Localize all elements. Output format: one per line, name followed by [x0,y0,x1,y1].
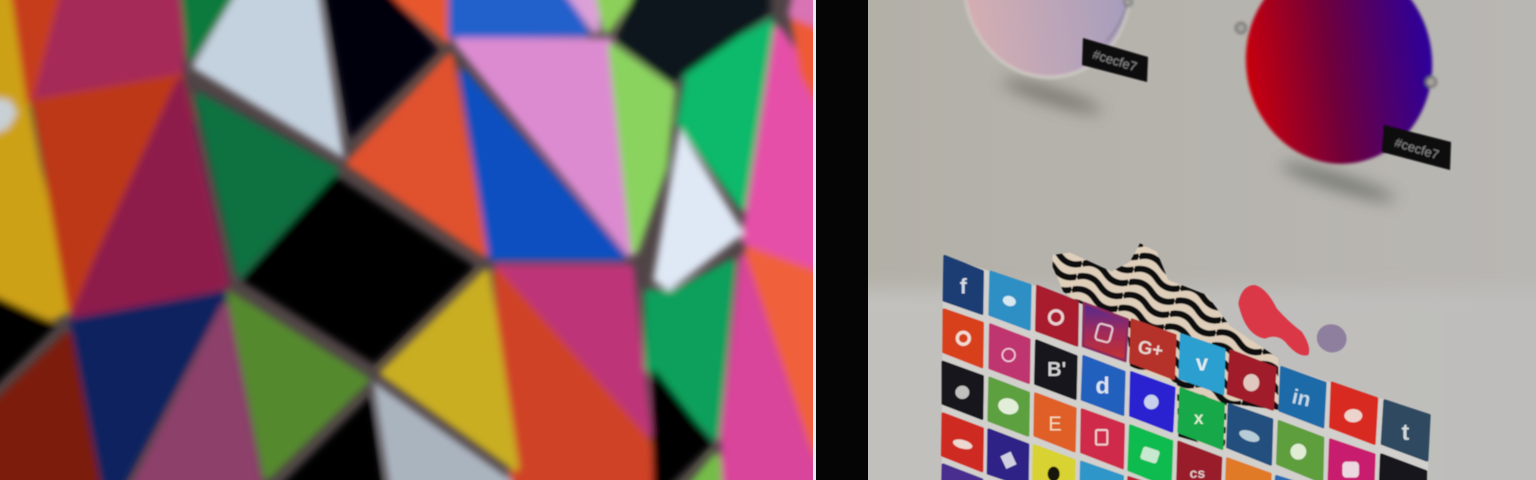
vivid gradient circle [1233,0,1445,176]
tile: tumblr: t [1401,419,1409,445]
blue bottom [730,460,790,480]
tile: stack [988,430,1028,480]
tile: reddit [1330,383,1377,444]
tile: linkedin [1280,367,1325,427]
orange facet [36,78,190,310]
yellow facet centre [384,273,515,467]
pale gradient circle [951,0,1143,90]
black top facet [322,0,437,137]
tile: delicious [1082,356,1124,415]
tile: soundcloud [942,414,983,471]
shadow: pale circle [1000,74,1104,118]
tile: blue [1275,476,1320,480]
grid backing [941,256,1430,480]
monitor edge [813,0,817,480]
circle fill [1233,0,1445,176]
orange strip [8,0,64,108]
black lower right facet [654,370,711,480]
blue large facet [463,73,622,257]
olive green facet [231,296,366,476]
label text: #cecfe7 [1393,135,1441,162]
tile: twitter [990,272,1030,329]
orange diamond facet [350,57,484,253]
handle right [1426,77,1436,87]
pink corner [792,0,830,28]
tile: tumblr [1382,401,1429,460]
tile: dribbble [990,325,1029,383]
green top facet [183,0,243,57]
bright green facet [680,23,771,207]
orange top facet [377,0,447,40]
tile: behance [1035,341,1076,399]
pink right lower [724,258,830,480]
pale spot [0,96,17,140]
tile: vimeo: v [1196,351,1209,376]
circle fill [953,0,1141,87]
wall upper background [868,0,1536,480]
tile: google plus [1130,320,1175,379]
tile: facebook: f [960,274,968,298]
label box [1382,125,1451,170]
orange right lower [739,241,813,464]
tile: flickr [1329,440,1374,480]
black diamond [243,177,473,363]
tile: facebook [944,256,983,314]
label box [1082,38,1148,82]
tile: blogger [944,310,983,367]
icon grid and blobs [941,243,1430,480]
tile: evernote [1277,421,1323,480]
wave pattern blob [1053,243,1278,450]
tile: digg [1227,405,1272,464]
white right facet [654,130,743,290]
panel: design board [840,0,1536,480]
mauve blob [1313,320,1351,357]
light green top [596,0,642,30]
tile: google plus: G+ [1136,336,1165,361]
mauve facet [128,308,262,480]
tile: snapchat [1033,445,1074,480]
tile: pinterest [1036,286,1078,345]
tile: red small [1128,477,1147,480]
colour label: pale [1082,38,1148,82]
tile: xing [1179,389,1224,449]
grey facet [374,383,512,480]
label text: #cecfe7 [1091,47,1139,74]
pink facet [458,42,630,253]
wall lower background [840,289,1536,480]
tile: vimeo [1180,335,1224,394]
tile: orange [1226,459,1270,480]
small pink top facet [560,0,596,30]
black facet left [0,290,55,400]
dashed connector [1106,2,1128,42]
green lower facet [648,263,732,437]
tile: wechat [989,378,1029,435]
tile: youtube [1228,351,1275,409]
tile: purple [942,465,982,480]
tile: dark [1380,455,1426,480]
light green bottom [680,457,726,480]
tile: blue second [1081,462,1123,480]
light green facet [612,47,672,250]
tile: foursquare [1081,410,1124,468]
dark green facet [199,97,335,273]
tile: delicious: d [1096,372,1110,398]
navy facet [74,295,222,480]
magenta facet [497,268,648,433]
tile: instagram [1083,303,1128,361]
blue top facet [452,0,586,35]
tile: etsy: E [1048,414,1062,436]
maroon top facet [36,0,182,103]
yellow facet [0,0,71,317]
handle left [1236,23,1246,33]
black lower facet [268,397,384,480]
tile: xing: x [1194,408,1204,428]
tile: behance: B' [1047,359,1066,381]
tile: etsy [1035,394,1075,451]
tile: linkedin: in [1290,385,1313,412]
tile: lastfm [1177,442,1221,480]
pink right facet [745,30,830,280]
handle [1124,0,1132,6]
maroon lower facet [74,82,226,318]
white facet [193,0,343,157]
monitor bezel [816,0,868,480]
panel: blurred geometric screen [0,0,830,480]
shadow: vivid circle [1279,158,1397,206]
colour label: vivid [1382,125,1451,170]
tile: dailymotion [1130,372,1174,431]
tile: houzz [1129,426,1172,480]
social tiles [942,256,1429,480]
red orange facet [497,273,650,480]
orange right strip [785,14,813,108]
tile: github [943,362,983,419]
black top right facet [617,0,769,82]
red blob [1238,285,1309,356]
dark red facet [0,336,100,480]
circle rim [951,0,1143,90]
